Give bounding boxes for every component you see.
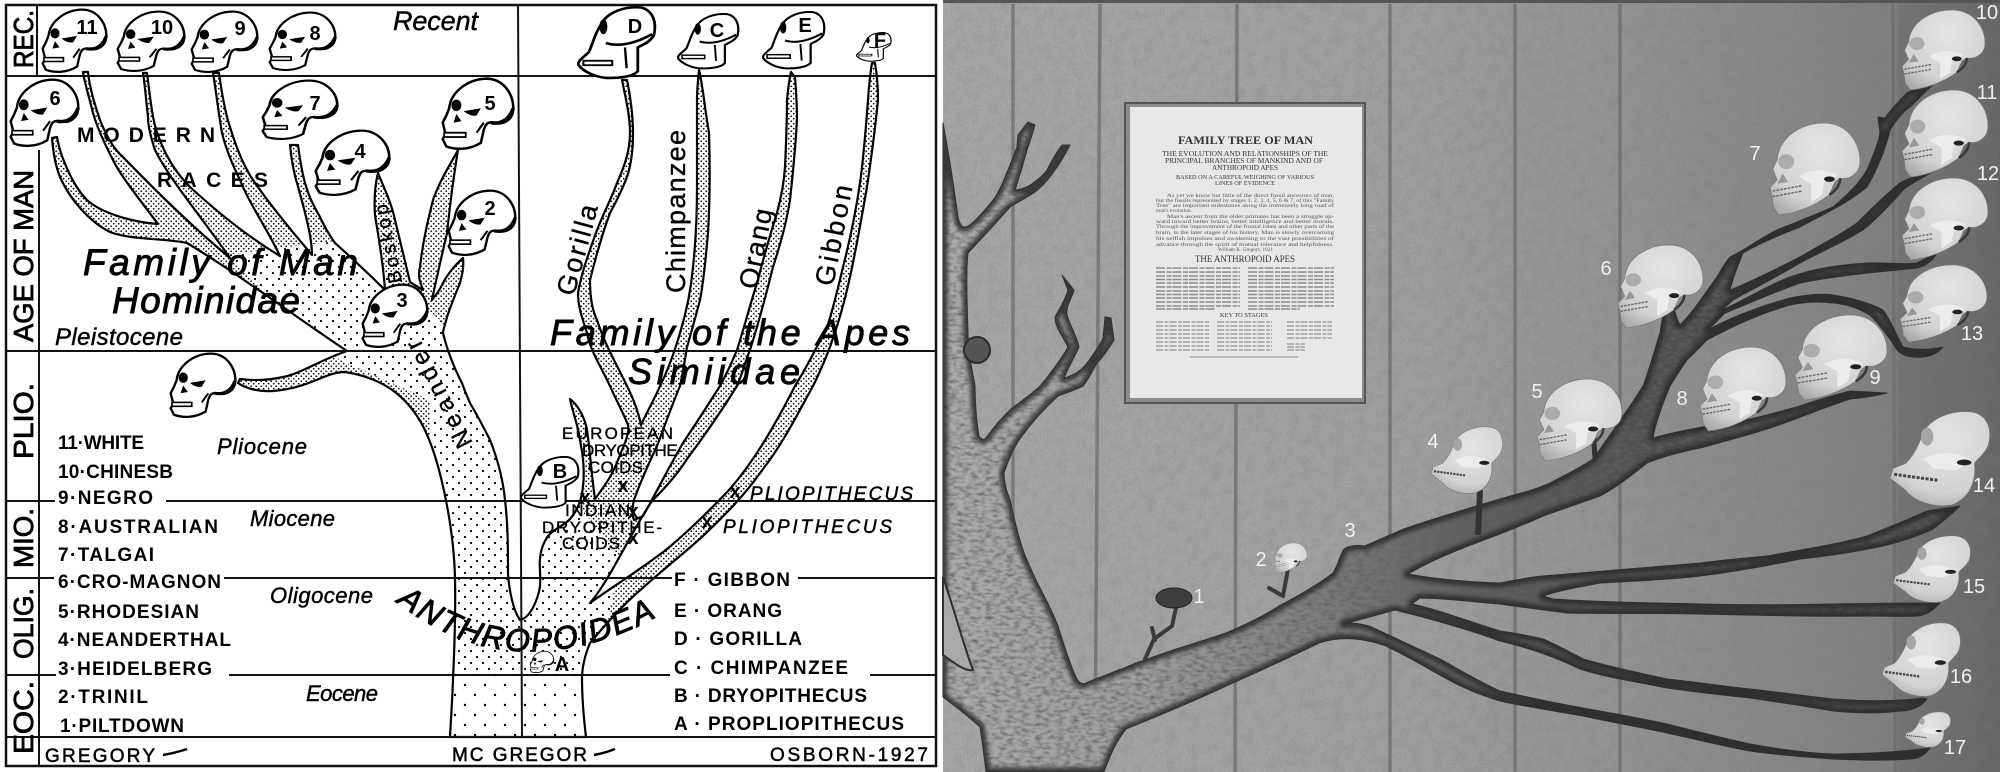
skull: 8 australian xyxy=(270,13,335,70)
label: dryopithecoids xyxy=(542,424,683,553)
fossil markers: x xyxy=(617,475,629,497)
epoch names: Miocene xyxy=(250,506,335,531)
specimen 9 xyxy=(1795,315,1887,400)
skull: D gorilla xyxy=(578,7,655,78)
specimen 11 xyxy=(1902,82,1997,177)
legend: human stages xyxy=(58,433,231,737)
specimen 6 xyxy=(1600,245,1703,328)
label: dryopithecoids: INDIAN xyxy=(565,501,630,520)
credits footer: GREGORY xyxy=(45,746,155,767)
fossil markers: x xyxy=(627,527,639,549)
label: pliopithecus: PLIOPITHECUS xyxy=(723,517,892,538)
label: dryopithecoids: EUROPEAN xyxy=(562,424,673,443)
poster: family tree of man: THE EVOLUTION AND RELATIONSHIPS OF THE xyxy=(1162,149,1328,158)
skull: 7 talgai xyxy=(263,81,337,139)
wall panel grooves xyxy=(1013,4,1895,772)
specimen 12: 12 xyxy=(1977,163,1999,185)
legend: ape stages: D · GORILLA xyxy=(674,629,802,650)
skull: A propliopithecus: A xyxy=(555,654,569,676)
heading: family of the apes: Simiidae xyxy=(628,351,800,392)
epoch axis labels: OLIG. xyxy=(8,588,39,659)
label: pliopithecus xyxy=(723,484,913,538)
legend: human stages: 5·RHODESIAN xyxy=(58,602,199,623)
poster: family tree of man: Tree" are important milestones along the immensely long road of xyxy=(1156,202,1334,209)
skull: 6 cro-magnon: 6 xyxy=(49,88,61,110)
credits footer xyxy=(45,745,928,767)
specimen 6: 6 xyxy=(1600,258,1612,280)
specimen 1 xyxy=(1156,586,1205,608)
specimen 16: 16 xyxy=(1950,666,1972,688)
credits footer: OSBORN-1927 xyxy=(770,745,928,766)
specimen 13 xyxy=(1900,265,1987,345)
legend: human stages: 11·WHITE xyxy=(58,433,144,454)
epoch names: Pleistocene xyxy=(55,324,183,351)
poster: family tree of man: Man's ascent from the older primates has been a struggle up- xyxy=(1167,213,1334,220)
branch labels: ape species: Chimpanzee xyxy=(661,130,691,293)
poster: family tree of man: KEY TO STAGES xyxy=(1220,313,1268,319)
label: dryopithecoids: COIDS xyxy=(562,534,620,553)
poster: family tree of man: Through the improvement of the frontal lobes and other parts of the xyxy=(1156,223,1335,230)
epoch names: Oligocene xyxy=(270,583,373,608)
skull: 9 negro: 9 xyxy=(234,18,246,40)
skull: D gorilla: D xyxy=(628,16,642,38)
specimen 15 xyxy=(1893,536,1985,602)
specimen 4: 4 xyxy=(1427,431,1439,453)
epoch axis labels xyxy=(8,10,39,754)
poster: family tree of man: FAMILY TREE OF MAN xyxy=(1178,133,1313,147)
skull: F gibbon: F xyxy=(874,30,886,52)
skull: 11 white: 11 xyxy=(76,17,98,39)
skull: 6 cro-magnon xyxy=(11,80,78,146)
skull: C chimpanzee: C xyxy=(710,20,724,42)
legend: human stages: 9·NEGRO xyxy=(58,488,153,509)
legend: ape stages: C · CHIMPANZEE xyxy=(674,658,848,679)
label: boskop and neander branches xyxy=(371,203,478,453)
label: dryopithecoids: DRYOPITHE- xyxy=(542,518,662,537)
poster: family tree of man: THE ANTHROPOID APES xyxy=(1195,255,1295,265)
specimen 8: 8 xyxy=(1676,388,1688,410)
epoch names: Eocene xyxy=(306,681,378,706)
legend: human stages: 8·AUSTRALIAN xyxy=(58,517,218,538)
fossil markers xyxy=(579,475,741,549)
epoch axis labels: AGE OF MAN xyxy=(8,170,39,342)
legend: human stages: 6·CRO-MAGNON xyxy=(58,572,221,593)
chart grid: epoch rows and columns xyxy=(6,5,936,766)
label: modern races: MODERN xyxy=(77,124,215,147)
specimen 14: 14 xyxy=(1973,475,1995,497)
branch labels: ape species: Gibbon xyxy=(809,182,858,288)
specimen 16 xyxy=(1882,623,1972,696)
credits footer: MC GREGOR xyxy=(452,745,587,766)
poster: family tree of man: PRINCIPAL BRANCHES OF MANKIND AND OF xyxy=(1165,156,1323,165)
epoch names xyxy=(55,6,479,706)
skull: E orang xyxy=(763,12,824,68)
poster: family tree of man: man's evolution. xyxy=(1156,208,1193,214)
poster: family tree of man xyxy=(1125,103,1365,403)
poster: family tree of man: brain, in the later stages of his history, Man is slowly overcoming xyxy=(1156,229,1334,236)
legend: human stages: 3·HEIDELBERG xyxy=(58,659,212,680)
skull: B dryopithecus: B xyxy=(553,461,567,483)
heading: family of the apes: Family of the Apes xyxy=(550,312,910,353)
label: modern races xyxy=(77,124,268,192)
skull: 3 heidelberg: 3 xyxy=(396,290,408,312)
fossil markers: x xyxy=(579,487,591,509)
panel: museum photograph xyxy=(943,0,2000,772)
skull: 2 trinil xyxy=(449,191,515,255)
specimen 15: 15 xyxy=(1963,576,1985,598)
label: dryopithecoids: DRYOPITHE- xyxy=(582,441,683,460)
epoch axis labels: REC. xyxy=(8,10,39,68)
branch labels: ape species xyxy=(551,130,858,299)
specimen 8 xyxy=(1676,347,1786,431)
specimen 10: 10 xyxy=(1976,2,1998,24)
heading: family of man: Family of Man xyxy=(83,242,358,283)
specimen 4 xyxy=(1427,427,1503,493)
poster: family tree of man: LINES OF EVIDENCE xyxy=(1215,181,1275,187)
skull: 4 neanderthal xyxy=(316,131,389,195)
specimen 14 xyxy=(1890,411,1995,506)
poster: family tree of man: ANTHROPOID APES xyxy=(1212,163,1278,172)
panel: phylogenetic chart xyxy=(4,4,938,768)
label: boskop and neander branches: Neander xyxy=(401,335,478,453)
specimen 10 xyxy=(1902,2,1998,90)
fossil markers: x xyxy=(729,481,741,503)
fossil markers: x xyxy=(627,501,639,523)
skull: 10 chinese xyxy=(118,12,184,71)
skull: 5 rhodesian: 5 xyxy=(484,93,496,115)
epoch names: Pliocene xyxy=(217,434,307,459)
poster: family tree of man: William K. Gregory, 1921 xyxy=(1218,247,1273,253)
specimen 2: 2 xyxy=(1255,549,1267,571)
poster: family tree of man: ward toward better brains, better intelligence and better morals. xyxy=(1156,219,1335,225)
branch labels: ape species: Gorilla xyxy=(551,200,604,299)
skull: E orang: E xyxy=(798,15,812,37)
legend: human stages: 7·TALGAI xyxy=(58,545,154,566)
poster: family tree of man: but the fossils represented by stages 1, 2, 3, 4, 5, 6 & 7, of this "Family xyxy=(1156,197,1334,204)
epoch names: Recent xyxy=(393,6,479,36)
skull: 4 neanderthal: 4 xyxy=(354,141,366,163)
label: modern races: RACES xyxy=(157,169,268,192)
heading: family of man: Hominidae xyxy=(112,280,300,321)
skull: 3 heidelberg xyxy=(363,285,427,347)
skull: C chimpanzee xyxy=(678,14,738,68)
epoch axis labels: MIO. xyxy=(8,508,39,568)
skull: 9 negro xyxy=(192,12,257,72)
specimen 1: 1 xyxy=(1193,586,1205,608)
specimen 11: 11 xyxy=(1977,82,1997,104)
skull: 10 chinese: 10 xyxy=(151,17,173,39)
specimen 12 xyxy=(1902,163,1999,260)
branch labels: ape species: Orang xyxy=(733,206,778,291)
fossil markers: x xyxy=(701,511,713,533)
poster: family tree of man: As yet we know but little of the direct fossil ancestors of man, xyxy=(1167,192,1335,199)
specimen 9: 9 xyxy=(1869,367,1881,389)
legend: ape stages: F · GIBBON xyxy=(674,570,790,591)
specimen 5 xyxy=(1531,379,1622,461)
tree diagram: hominid and ape branches xyxy=(52,63,878,740)
label 3: 3 xyxy=(1344,520,1356,542)
label: pliopithecus: PLIOPITHECUS xyxy=(750,484,913,505)
legend: ape stages xyxy=(674,570,904,735)
label: dryopithecoids: COIDS xyxy=(588,458,643,477)
specimen 7: 7 xyxy=(1749,143,1761,165)
poster: family tree of man: BASED ON A CAREFUL WEIGHING OF VARIOUS xyxy=(1176,175,1314,181)
legend: human stages: 4·NEANDERTHAL xyxy=(58,630,231,651)
specimen 7 xyxy=(1749,123,1860,215)
skull: 11 white xyxy=(43,10,106,72)
tree: carved branching trunk xyxy=(943,70,1960,772)
legend: ape stages: B · DRYOPITHECUS xyxy=(674,686,867,707)
specimen 17: 17 xyxy=(1944,737,1966,759)
poster: family tree of man: advance through the spirit of mutual tolerance and helpfulness. xyxy=(1156,241,1335,248)
heading: family of man xyxy=(83,242,358,321)
specimen 13: 13 xyxy=(1961,323,1983,345)
skull: B dryopithecus xyxy=(521,457,578,508)
legend: ape stages: A · PROPLIOPITHECUS xyxy=(674,714,904,735)
poster: family tree of man: his selfish impulses and awakening to the vast possibilities of xyxy=(1156,235,1334,242)
label: anthropoidea arc: ANTHROPOIDEA xyxy=(394,590,656,652)
skull: 7 talgai: 7 xyxy=(309,93,321,115)
specimen 17 xyxy=(1905,712,1966,759)
label: boskop and neander branches: Boskop xyxy=(371,203,407,285)
skull: 2 trinil: 2 xyxy=(484,198,496,220)
skull: 8 australian: 8 xyxy=(309,23,321,45)
specimen 2 xyxy=(1255,543,1307,573)
legend: ape stages: E · ORANG xyxy=(674,601,782,622)
heading: family of the apes xyxy=(550,312,910,392)
legend: human stages: 1·PILTDOWN xyxy=(60,716,184,737)
specimen 5: 5 xyxy=(1531,381,1543,403)
epoch axis labels: PLIO. xyxy=(8,383,39,459)
legend: human stages: 2·TRINIL xyxy=(58,687,148,708)
epoch axis labels: EOC. xyxy=(8,681,39,754)
skull: F gibbon xyxy=(857,30,891,61)
legend: human stages: 10·CHINESB xyxy=(58,462,173,483)
skull: A propliopithecus xyxy=(530,651,569,676)
skull: 5 rhodesian xyxy=(443,79,513,149)
skull: 1 piltdown xyxy=(171,354,235,417)
